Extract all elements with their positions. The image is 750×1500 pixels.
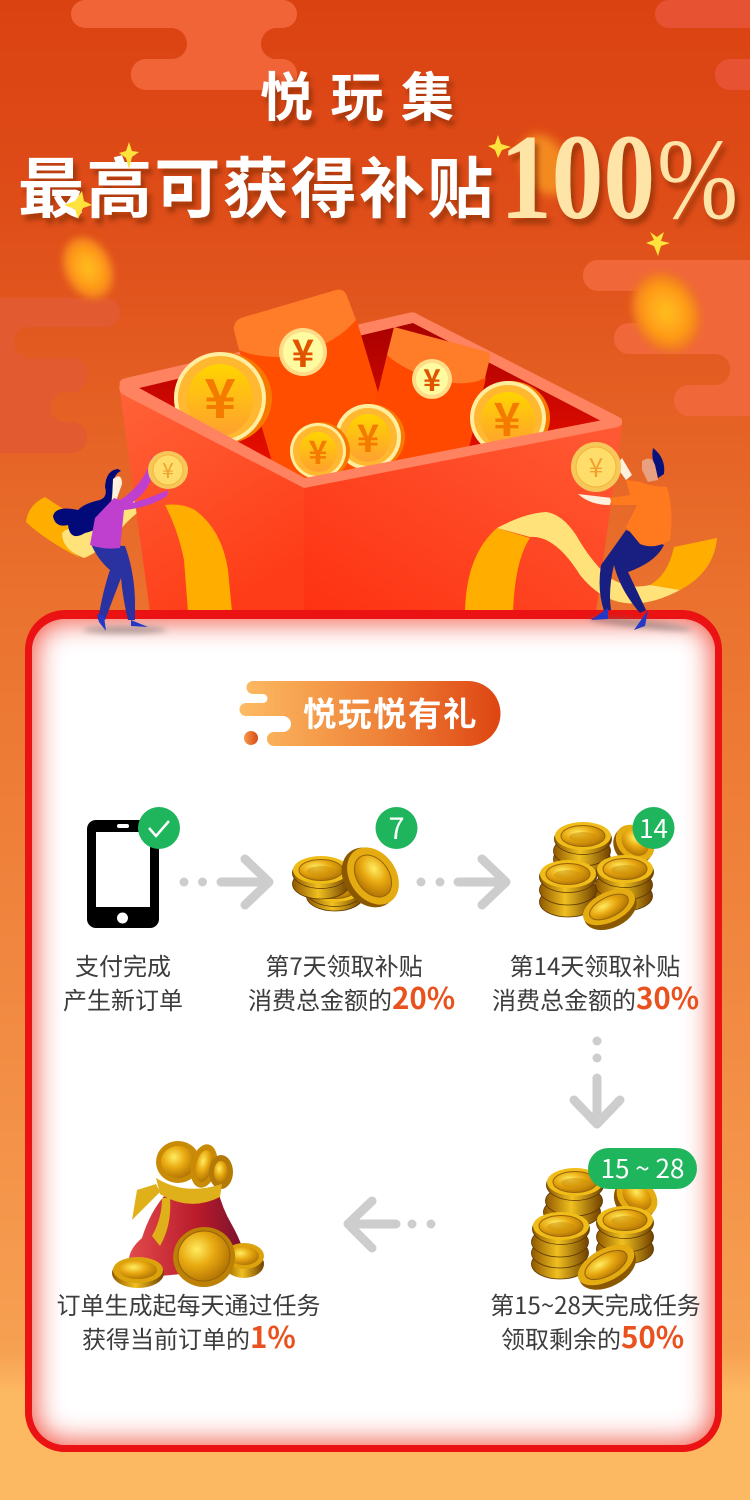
big coin left: ¥ <box>204 355 236 434</box>
day badge 7 <box>376 806 418 849</box>
box right face <box>304 425 622 612</box>
caption: step 3: 第14天领取补贴 <box>510 947 680 982</box>
sparkle stars <box>64 135 670 256</box>
big coin left <box>174 352 272 444</box>
feet <box>591 608 648 630</box>
box left face <box>120 392 304 612</box>
legs <box>91 544 135 620</box>
ribbon behind box <box>26 495 186 558</box>
box front rim <box>119 384 622 488</box>
blurred falling coin behind percent <box>512 127 578 203</box>
cloud: left middle <box>0 298 120 453</box>
blurred falling coin: left <box>52 228 124 308</box>
ribbon right <box>465 512 717 612</box>
small coin middle back: ¥ <box>357 408 379 463</box>
caption: step 3 line 2: 消费总金额的30% <box>492 976 699 1018</box>
torso <box>610 480 671 546</box>
arrow: step 1 to 2 <box>180 859 269 905</box>
cloud: top centre <box>71 0 297 90</box>
day badge 15 to 28: 15 ~ 28 <box>601 1149 684 1186</box>
ribbon left band <box>165 505 232 612</box>
red packet right <box>355 327 490 495</box>
packet coin right <box>412 356 452 400</box>
front coin stack right <box>224 1243 264 1278</box>
icon: phone with check <box>87 807 180 928</box>
man figure holding coin <box>571 442 692 633</box>
gift box <box>119 290 622 612</box>
subtitle: maximum subsidy: 最高可获得补贴 <box>18 136 495 232</box>
hand coin right <box>571 442 621 492</box>
caption: step 4 line 2: 领取剩余的50% <box>501 1315 684 1357</box>
hand coin left <box>148 451 188 489</box>
section heading badge: 悦玩悦有礼 <box>303 687 478 736</box>
woman figure holding coin <box>53 451 188 634</box>
cloud: top right <box>655 0 750 90</box>
neck and head <box>642 459 658 482</box>
arrow: step 4 to 5 <box>348 1201 436 1248</box>
arrow: step 3 down to 4 <box>574 1036 620 1124</box>
face <box>112 476 122 502</box>
icon: two coin stacks, step 7 <box>292 836 410 918</box>
arm skin <box>578 458 632 505</box>
icon: coin pile, step 14 <box>540 817 661 938</box>
legs <box>600 530 664 613</box>
packet coin left <box>279 323 327 378</box>
bag tie <box>132 1178 222 1246</box>
small coin middle front <box>290 422 350 480</box>
packet coin right: ¥ <box>423 356 441 400</box>
caption: step 4: 第15~28天完成任务 <box>490 1286 701 1321</box>
bag body <box>129 1190 246 1276</box>
front big coin <box>169 1223 239 1291</box>
caption: step 5: 订单生成起每天通过任务 <box>56 1286 320 1321</box>
box inner <box>139 323 603 480</box>
caption: step 1: 支付完成 <box>75 947 171 982</box>
hand coin right: ¥ <box>589 448 603 485</box>
big coin right <box>470 381 550 455</box>
day badge 7: 7 <box>388 806 405 848</box>
small coin middle front: ¥ <box>309 428 328 474</box>
caption: step 2 line 2: 消费总金额的20% <box>248 976 455 1018</box>
coins above bag <box>156 1141 200 1183</box>
red packet left <box>234 290 378 500</box>
day badge 14: 14 <box>639 809 668 846</box>
feet <box>97 614 148 631</box>
section heading badge <box>240 681 501 746</box>
title: 悦玩集 <box>260 56 472 132</box>
top <box>90 456 168 549</box>
day badge 14 <box>632 807 674 849</box>
caption: step 2: 第7天领取补贴 <box>265 947 423 982</box>
hair <box>652 448 664 478</box>
caption: step 1 line 2: 产生新订单 <box>63 981 183 1016</box>
small coin middle back <box>335 404 405 470</box>
packet coin left: ¥ <box>292 323 314 378</box>
hand coin left: ¥ <box>162 455 174 485</box>
cloud: right middle <box>583 260 750 416</box>
floor shadow <box>83 626 167 634</box>
floor shadow <box>588 615 692 633</box>
blurred falling coin: right <box>619 261 713 363</box>
icon: money bag <box>112 1141 264 1291</box>
hair <box>53 469 121 536</box>
front small coin left <box>112 1257 164 1288</box>
panel: rewards card <box>25 610 722 1452</box>
big coin right: ¥ <box>493 384 521 450</box>
box back rim <box>120 312 622 426</box>
arrow: step 2 to 3 <box>416 859 506 905</box>
subtitle: 100 percent: 100 <box>500 110 655 245</box>
icon: coin pile, step 15 to 28 <box>532 1168 665 1299</box>
day badge 15 to 28 <box>588 1148 697 1189</box>
caption: step 5 line 2: 获得当前订单的1% <box>82 1315 296 1357</box>
